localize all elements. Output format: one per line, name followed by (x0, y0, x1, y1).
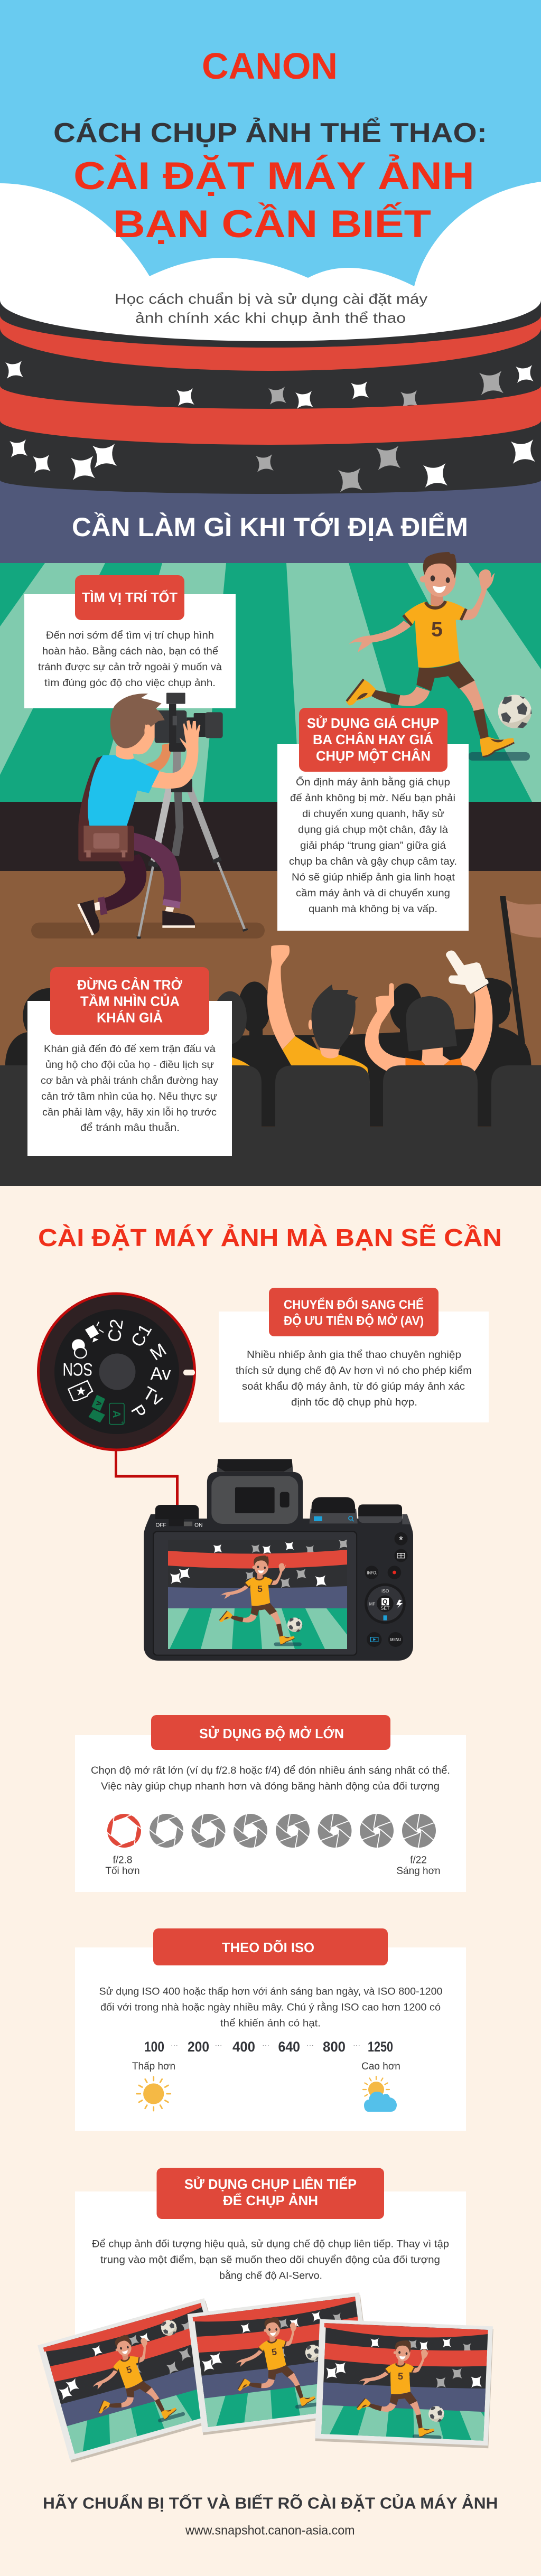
heading tab: wide aperture (151, 1715, 390, 1750)
ISO scale: ··· (214, 2041, 222, 2049)
heading tab: tripod or monopod: BA CHÂN HAY GIÁ (313, 732, 433, 747)
body text: tripod or monopod: để ảnh không bị mờ. Nếu bạn phải (290, 793, 455, 804)
body text: tripod or monopod: di chuyển xung quanh, hãy sử (302, 809, 444, 820)
body text: aperture priority: định tốc độ chụp phù hợp. (291, 1397, 417, 1408)
aperture scale icons (84, 1792, 449, 1870)
aperture scale labels: f/22 (410, 1855, 427, 1866)
ISO labels: Cao hơn (361, 2061, 400, 2072)
ISO scale: 100 (144, 2039, 164, 2055)
heading tab: do not block: TẦM NHÌN CỦA (80, 993, 180, 1009)
subtitle (115, 291, 428, 326)
heading tab: burst mode: ĐỂ CHỤP ẢNH (223, 2193, 318, 2208)
body text: audience: cần phải làm vậy, hãy xin lỗi họ trước (42, 1107, 217, 1118)
burst photo 3: 5 (397, 2371, 404, 2382)
illustration: photographer with tripod (31, 693, 265, 939)
illustration: football player with ball: 5 (431, 617, 443, 641)
mode dial (38, 1294, 195, 1450)
heading tab: do not block: KHÁN GIẢ (97, 1010, 163, 1026)
body text: wide aperture: Chọn độ mở rất lớn (ví dụ f/2.8 hoặc f/4) để đón nhiều ánh sáng nhất có thể. (91, 1765, 450, 1776)
panel: tripod or monopod (277, 744, 469, 931)
mode dial: C2 (104, 1318, 127, 1343)
heading tab: wide aperture: SỬ DỤNG ĐỘ MỞ LỚN (199, 1725, 344, 1741)
ISO labels: Thấp hơn (132, 2061, 175, 2072)
mode dial: + (120, 1420, 124, 1426)
panel: switch to aperture priority (219, 1312, 489, 1422)
heading tab: aperture priority: ĐỘ ƯU TIÊN ĐỘ MỞ (AV) (284, 1313, 424, 1328)
ISO scale: 640 (278, 2039, 300, 2055)
spectators silhouette, left (5, 988, 50, 1065)
camera screen with player scene (168, 1540, 347, 1649)
illustration: camera back: ON (194, 1523, 202, 1529)
heading tab: find a good position (75, 575, 184, 620)
burst photo 3 (315, 2319, 493, 2449)
mode dial: P (127, 1401, 150, 1422)
body text: audience: cản trở tầm nhìn của họ. Nếu thực sự (41, 1091, 217, 1102)
illustration: camera back: Q (383, 1598, 388, 1606)
body text: ISO: Sử dụng ISO 400 hoặc thấp hơn với ánh sáng ban ngày, và ISO 800-1200 (99, 1986, 443, 1998)
mode dial: A (95, 1400, 103, 1407)
heading tab: tripod or monopod: SỬ DỤNG GIÁ CHỤP (307, 715, 439, 731)
heading: what to do at the venue: CẦN LÀM GÌ KHI TỚI ĐỊA ĐIỂM (72, 512, 468, 542)
body text: tripod or monopod: Ổn định máy ảnh bằng giá chụp (296, 776, 450, 788)
body text: aperture priority: thích sử dụng chế độ Av hơn vì nó cho phép kiểm (236, 1365, 472, 1376)
body text: tripod or monopod: chụp ba chân và gậy chụp cầm tay. (289, 856, 457, 867)
body text: good position: hoàn hảo. Bằng cách nào, bạn có thể (42, 645, 218, 657)
body text: tripod or monopod: dụng giá chụp một chân, đây là (298, 825, 448, 836)
ISO scale: ··· (171, 2041, 178, 2049)
footer URL: www.snapshot.canon-asia.com (185, 2524, 355, 2537)
body text: tripod or monopod: cầm máy ảnh và di chuyển xung (296, 888, 450, 899)
burst photo 2 (187, 2292, 363, 2435)
title: CÁCH CHỤP ẢNH THỂ THAO: (53, 117, 487, 148)
title (53, 117, 487, 246)
burst photo 1 (38, 2298, 209, 2462)
panel: burst mode (75, 2191, 466, 2378)
mode dial: SCN (63, 1359, 92, 1379)
ISO scale: 1250 (368, 2039, 393, 2055)
purple band (0, 465, 541, 563)
body text: wide aperture (91, 1765, 450, 1792)
body text: ISO: đối với trong nhà hoặc ngày nhiều mây. Chú ý rằng ISO cao hơn 1200 có (100, 2002, 441, 2013)
heading tab: watch the ISO (153, 1928, 388, 1965)
ISO scale: ··· (353, 2041, 360, 2049)
illustration: camera back: MF (369, 1602, 375, 1607)
heading tab: aperture priority (269, 1288, 439, 1336)
body text: audience: cơ bản và phải tránh chắn đường hay (41, 1075, 219, 1086)
ISO labels (132, 2061, 400, 2072)
body text: tripod or monopod: Nó sẽ giúp nhiếp ảnh gia linh hoạt (292, 872, 455, 883)
seat backs (0, 1065, 541, 1186)
body text: ISO (99, 1986, 443, 2029)
ISO scale: 800 (323, 2039, 346, 2055)
body text: burst mode: bằng chế độ AI-Servo. (219, 2270, 322, 2282)
title: CÀI ĐẶT MÁY ẢNH (73, 155, 474, 198)
panel: watch the ISO (75, 1947, 466, 2131)
panel: find a good position (24, 594, 236, 708)
body text: audience: để tránh mâu thuẫn. (80, 1122, 180, 1134)
illustration: camera back: ISO (381, 1588, 389, 1594)
body text: tripod or monopod: giải pháp “trung gian” giữa giá (300, 840, 446, 851)
body text: aperture priority: soát khẩu độ máy ảnh, từ đó giúp máy ảnh xác (242, 1381, 465, 1392)
burst photo 2: 5 (271, 2346, 277, 2357)
white cloud (0, 182, 541, 341)
mode dial: A (110, 1410, 122, 1418)
body text: aperture priority (236, 1350, 472, 1408)
body text: tripod or monopod (289, 776, 457, 915)
ISO scale: ··· (306, 2041, 314, 2049)
heading: camera settings you need: CÀI ĐẶT MÁY ẢNH MÀ BẠN SẼ CẦN (38, 1224, 502, 1251)
mode dial: Av (150, 1364, 171, 1384)
illustration: flag on pole (500, 896, 541, 1043)
body text: tripod or monopod: quanh mà không bị va vấp. (309, 904, 437, 915)
aperture scale labels: f/2.8 (113, 1855, 132, 1866)
body text: audience: ủng hộ cho đội của họ - điều lịch sự (45, 1060, 214, 1071)
body text: good position (38, 630, 222, 689)
body text: good position: Đến nơi sớm để tìm vị trí chụp hình (46, 630, 214, 641)
brown ground (0, 871, 541, 1186)
illustration: camera back: INFO. (367, 1570, 377, 1575)
icon: sun behind cloud (363, 2076, 397, 2112)
heading tab: tripod or monopod: CHỤP MỘT CHÂN (316, 748, 431, 764)
camera screen with player scene: 5 (257, 1584, 263, 1594)
illustration: camera back (144, 1459, 413, 1661)
body text: wide aperture: Việc này giúp chụp nhanh hơn và đóng băng hành động của đối tượng (101, 1781, 440, 1792)
illustration: camera back: OFF (155, 1523, 166, 1529)
illustration: cheering crowd (0, 945, 541, 1186)
header sky (0, 0, 541, 370)
body text: good position: tránh được sự cản trở ngoài ý muốn và (38, 662, 222, 673)
ISO scale: 200 (188, 2039, 209, 2055)
mode dial: C1 (127, 1320, 156, 1351)
subtitle: ảnh chính xác khi chụp ảnh thể thao (135, 310, 406, 326)
aperture scale labels: Tối hơn (105, 1866, 140, 1877)
illustration: camera back: * (399, 1534, 403, 1546)
connector line from dial to camera (116, 1450, 178, 1505)
dark trackside band (0, 802, 541, 871)
ISO scale (144, 2039, 393, 2055)
mode dial: Tv (139, 1383, 166, 1410)
body text: audience (41, 1044, 219, 1134)
heading tab: tripod or monopod (299, 708, 447, 772)
ISO scale: 400 (232, 2039, 255, 2055)
body text: aperture priority: Nhiều nhiếp ảnh gia thể thao chuyên nghiệp (247, 1350, 461, 1361)
heading tab: find a good position: TÌM VỊ TRÍ TỐT (82, 589, 178, 605)
mode dial: M (146, 1339, 170, 1364)
aperture scale labels: Sáng hơn (396, 1866, 441, 1877)
panel: use a wide aperture (75, 1735, 466, 1892)
illustration: football player with ball (346, 552, 532, 761)
body text: audience: Khán giả đến đó để xem trận đấu và (44, 1044, 216, 1055)
heading tab: do not block (50, 967, 209, 1035)
body text: burst mode (92, 2238, 449, 2282)
aperture scale labels (105, 1855, 441, 1877)
title: BẠN CẦN BIẾT (113, 203, 431, 246)
body text: burst mode: trung vào một điểm, bạn sẽ muốn theo dõi chuyển động của đối tượng (100, 2254, 440, 2266)
subtitle: Học cách chuẩn bị và sử dụng cài đặt máy (115, 291, 428, 307)
spectators and raised arms (213, 945, 541, 1127)
footer heading: HÃY CHUẨN BỊ TỐT VÀ BIẾT RÕ CÀI ĐẶT CỦA MÁY ẢNH (43, 2493, 498, 2512)
heading tab: burst mode (156, 2168, 384, 2219)
ISO scale: ··· (262, 2041, 269, 2049)
heading tab: aperture priority: CHUYỂN ĐỔI SANG CHẾ (284, 1297, 424, 1312)
illustration: camera back: SET (380, 1606, 390, 1611)
brand: Canon: CANON (202, 45, 338, 87)
heading tab: do not block: ĐỪNG CẢN TRỞ (77, 976, 183, 993)
body text: good position: tìm đúng góc độ cho việc chụp ảnh. (44, 678, 216, 689)
icon: sun (137, 2077, 171, 2111)
illustration: camera back: MENU (390, 1637, 401, 1642)
stadium stands with flashes (0, 296, 541, 502)
heading tab: burst mode: SỬ DỤNG CHỤP LIÊN TIẾP (184, 2176, 357, 2192)
burst photo 1: 5 (125, 2364, 133, 2376)
panel: do not block the audience view (27, 1001, 232, 1156)
heading tab: watch the ISO: THEO DÕI ISO (222, 1940, 314, 1955)
body text: burst mode: Để chụp ảnh đối tượng hiệu quả, sử dụng chế độ chụp liên tiếp. Thay vì tập (92, 2238, 449, 2250)
body text: ISO: thể khiến ảnh có hạt. (220, 2018, 321, 2029)
football field (0, 563, 541, 802)
